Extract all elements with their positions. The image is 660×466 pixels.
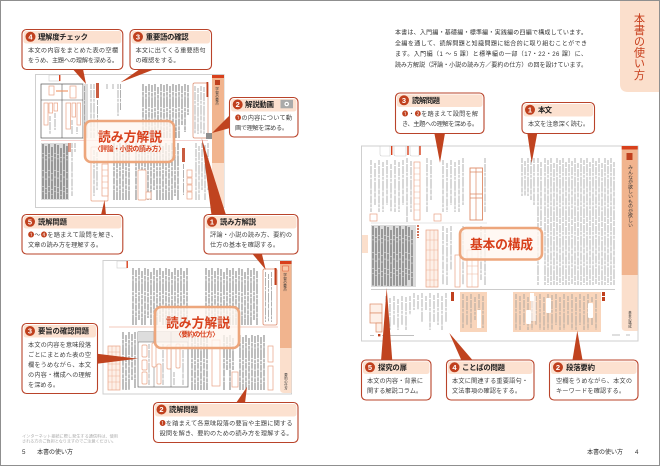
thumbnail page: 読み方解説 評論・小説の読み方 xyxy=(36,74,224,208)
callout: 3 要旨の確認問題: を深める。 xyxy=(28,381,59,389)
callout: 5 探究の扉: 関する解説コラム。 xyxy=(367,387,422,395)
label: 読み方解説（評論・小説の読み方） xyxy=(85,121,174,162)
callout: 1 読み方解説: 仕方の基本を確認する。 xyxy=(210,241,279,249)
footer left: page number and title: 本書の使い方 xyxy=(37,448,73,456)
callout: 2 読解問題: ❶を踏まえて各意味段落の要旨や主題に関する xyxy=(160,420,292,428)
label: 読み方解説（評論・小説の読み方）: 〈評論・小説の読み方〉 xyxy=(94,144,165,153)
callout: 4 理解度チェック xyxy=(22,30,123,84)
callout: 4 理解度チェック: 本文の内容をまとめた表の空欄 xyxy=(28,46,118,54)
callout: 3 重要語の確認 xyxy=(121,30,212,82)
callout: 2 解説動画: ❶の内容について動 xyxy=(235,114,292,122)
callout: 5 読解問題: 文章の読み方を理解する。 xyxy=(28,241,102,249)
callout: 3 読解問題（基本の構成） xyxy=(396,93,484,163)
callout: 3 読解問題（基本の構成）: 3 xyxy=(402,96,406,105)
callout: 4 ことばの問題 xyxy=(446,333,534,400)
callout: 2 解説動画 xyxy=(212,98,298,137)
callout: 1 本文 xyxy=(522,102,594,163)
callout: 4 ことばの問題: 4 xyxy=(452,363,457,372)
tab: 本書の使い方 xyxy=(620,1,659,92)
callout: 3 要旨の確認問題: の内容・構成への理解 xyxy=(28,371,91,379)
callout: 2 段落要約: 段落要約 xyxy=(566,363,596,372)
callout: 3 要旨の確認問題: 3 xyxy=(28,327,32,336)
label: 読み方解説（要約の仕方）: 〈要約の仕方〉 xyxy=(175,330,219,338)
callout: 4 ことばの問題: 本文に関連する重要語句・ xyxy=(452,377,528,385)
footer left: page number and title: 5 xyxy=(22,449,26,456)
intro text: 本書は、入門編・基礎編・標準編・実践編の四編で構成しています。 xyxy=(395,29,587,37)
thumbnail page: 基本の構成: 基本の構成 xyxy=(627,310,632,329)
callout: 1 読み方解説 xyxy=(202,138,298,270)
footer right: title and page number xyxy=(587,448,639,456)
callout: 2 読解問題 xyxy=(154,387,298,442)
callout: 5 探究の扉: 5 xyxy=(368,363,372,372)
callout: 2 解説動画: 2 xyxy=(236,100,240,109)
callout: 3 重要語の確認: の確認をする。 xyxy=(136,56,180,64)
intro text xyxy=(395,29,587,69)
callout: 2 段落要約: キーワードを確認する。 xyxy=(556,387,625,395)
callout: 1 読み方解説: 1 xyxy=(210,218,214,226)
callout: 3 要旨の確認問題: ごとにまとめた表の空 xyxy=(28,351,91,359)
footer right: title and page number: 4 xyxy=(635,449,639,456)
callout: 3 重要語の確認: 本文に出てくる重要語句 xyxy=(136,46,206,54)
intro text: 読み方解説（評論・小説の読み方／要約の仕方）の回を設けています。 xyxy=(395,61,587,69)
callout: 4 理解度チェック: 理解度チェック xyxy=(38,32,88,41)
callout: 3 重要語の確認: 重要語の確認 xyxy=(146,32,189,41)
callout: 5 読解問題: 5 xyxy=(28,218,32,226)
callout: 1 読み方解説: 読み方解説 xyxy=(220,217,257,226)
callout: 5 探究の扉: 探究の扉 xyxy=(378,363,407,372)
callout: 5 探究の扉: 本文の内容・背景に xyxy=(367,377,423,385)
callout: 1 読み方解説: 評論・小説の読み方、要約の xyxy=(210,231,292,239)
thumbnail page: 読み方解説 要約の仕方: 要約の仕方 xyxy=(283,372,288,391)
callout: 1 本文: 1 xyxy=(528,106,532,114)
callout: 3 要旨の確認問題: 欄をうめながら、本文 xyxy=(28,361,91,369)
callout: 2 解説動画: 画で理解を深める。 xyxy=(235,124,288,132)
intro text: 全編を通して、読解問題と知識問題に総合的に取り組むことができ xyxy=(395,39,587,47)
thumbnail page: 基本の構成: みんなが欲しいものが欲しい xyxy=(627,165,632,228)
footer left: page number and title xyxy=(22,448,73,456)
callout: 3 読解問題（基本の構成）: 読解問題 xyxy=(412,96,441,105)
tab: 本書の使い方: 本書の使い方 xyxy=(632,12,645,81)
callout: 2 段落要約: 2 xyxy=(556,363,560,372)
label: 読み方解説（要約の仕方） xyxy=(155,307,239,348)
icon: video camera xyxy=(280,100,293,108)
callout: 2 段落要約: 空欄をうめながら、本文の xyxy=(556,377,632,385)
callout: 3 要旨の確認問題 xyxy=(22,324,138,394)
thumbnail page: 読み方解説 要約の仕方: 学習の要点 xyxy=(282,272,288,292)
thumbnail page: 読み方解説 要約の仕方 xyxy=(103,260,292,394)
callout: 2 段落要約 xyxy=(550,331,638,400)
callout: 5 探究の扉 xyxy=(362,288,431,400)
callout: 4 ことばの問題: 文法事項の確認をする。 xyxy=(452,387,521,395)
callout: 1 本文: 本文 xyxy=(538,106,553,114)
callout: 4 ことばの問題: ことばの問題 xyxy=(462,363,506,372)
footnote: インターネット接続に際し発生する通信料は、使用 xyxy=(22,432,118,440)
callout: 4 理解度チェック: 4 xyxy=(28,32,33,42)
callout: 4 理解度チェック: をうめ、主題への理解を深める。 xyxy=(28,56,118,64)
callout: 2 読解問題: 2 xyxy=(159,405,164,414)
callout: 3 要旨の確認問題: 要旨の確認問題 xyxy=(38,327,90,336)
callout: 2 読解問題: 設問を解き、要約のための読み方を理解する。 xyxy=(160,430,292,438)
callout: 3 読解問題（基本の構成）: き、主題への理解を深める。 xyxy=(402,120,478,128)
thumbnail page: 読み方解説 評論・小説の読み方: 学習の要点 xyxy=(214,86,220,106)
footnote: される方のご負担となりますのでご注意ください。 xyxy=(22,438,116,444)
callout: 1 本文: 本文を注意深く読む。 xyxy=(528,120,589,128)
label: 読み方解説（評論・小説の読み方）: 読み方解説 xyxy=(98,130,162,144)
callout: 3 要旨の確認問題: 本文の内容を意味段落 xyxy=(28,341,92,349)
label: 読み方解説（要約の仕方）: 読み方解説 xyxy=(166,316,230,330)
callout: 2 解説動画: 解説動画 xyxy=(245,100,275,109)
callout: 3 読解問題（基本の構成）: ❶・❷を踏まえて設問を解 xyxy=(402,110,478,118)
label: 基本の構成 xyxy=(460,228,542,260)
callout: 5 読解問題: 読解問題 xyxy=(38,217,68,226)
intro text: ます。入門編（1 ～ 5 課）と標準編の一部（17・22・26 課）に、 xyxy=(395,50,587,58)
footer right: title and page number: 本書の使い方 xyxy=(587,448,623,456)
footnote xyxy=(22,432,118,444)
callout: 2 読解問題: 読解問題 xyxy=(169,405,199,414)
callout: 5 読解問題 xyxy=(22,200,123,254)
callout: 5 読解問題: ❶～❹を踏まえて設問を解き、 xyxy=(28,231,117,239)
label: 基本の構成: 基本の構成 xyxy=(470,237,533,252)
thumbnail page: 基本の構成 xyxy=(362,146,638,341)
callout: 3 重要語の確認: 3 xyxy=(136,32,140,42)
